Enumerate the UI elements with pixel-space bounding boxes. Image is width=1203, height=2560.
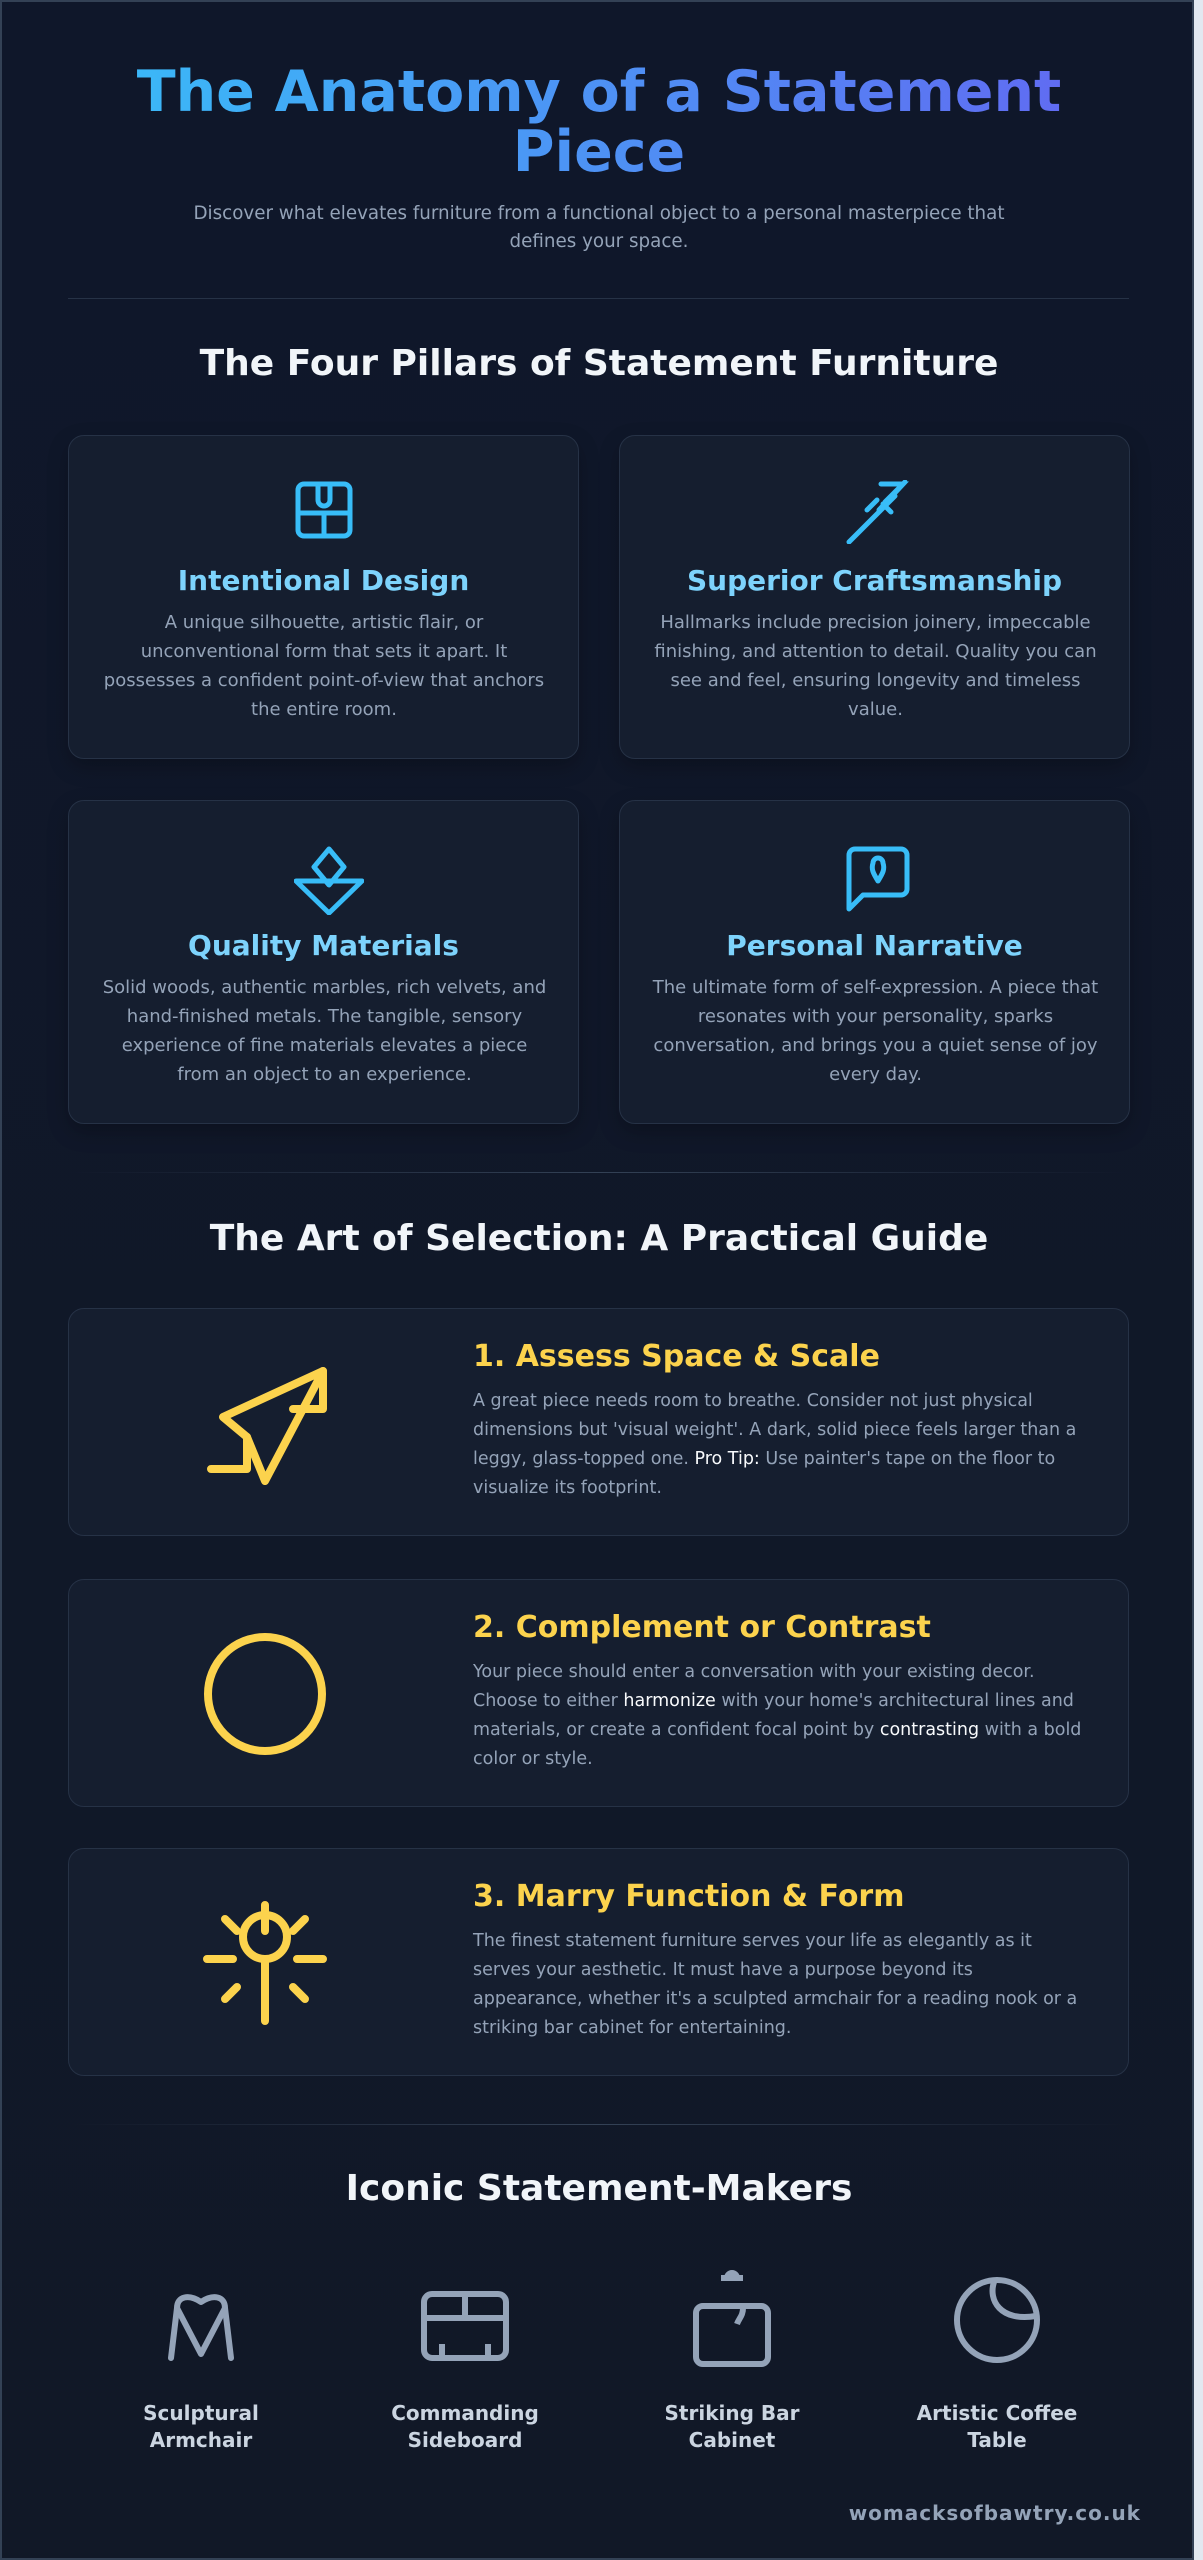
panel: materials: Quality Materials bbox=[188, 929, 459, 962]
icon: bar cabinet bbox=[693, 2270, 771, 2367]
item: coffee table: Table bbox=[967, 2428, 1027, 2452]
panel: step 1: A great piece needs room to breathe. Consider not just physical dimensions but 'visual weight'. A dark, solid piece feels larger than a leggy, glass-topped one. Pro Tip: Use painter's tape on the floor to visualize its footprint. bbox=[473, 1391, 1076, 1498]
item: bar cabinet bbox=[665, 2270, 800, 2452]
icon: speech bubble bbox=[846, 846, 910, 912]
icon: sideboard bbox=[421, 2291, 509, 2361]
footer: womacksofbawtry.co.uk bbox=[849, 2501, 1141, 2525]
item: coffee table bbox=[916, 2277, 1077, 2452]
icon: gem bbox=[294, 846, 364, 915]
item: coffee table: Artistic Coffee bbox=[917, 2401, 1077, 2425]
icon: grid bbox=[296, 482, 352, 538]
panel: craftsmanship: Superior Craftsmanship bbox=[687, 564, 1062, 597]
panel: craftsmanship: Hallmarks include precision joinery, impeccable finishing, and attention to detail. Quality you can see and feel, ensuring longevity and timeless value. bbox=[654, 612, 1097, 720]
subtitle: Discover what elevates furniture from a functional object to a personal masterpiece that defines your space. bbox=[193, 203, 1005, 252]
item: armchair: Sculptural bbox=[143, 2401, 259, 2425]
icon: armchair bbox=[168, 2294, 234, 2361]
item: armchair: Armchair bbox=[150, 2428, 252, 2452]
panel: step 2 bbox=[68, 1579, 1129, 1807]
panel: step 3: 3. Marry Function & Form bbox=[473, 1879, 904, 1914]
icon: tools bbox=[846, 480, 909, 544]
item: bar cabinet: Striking Bar bbox=[665, 2401, 799, 2425]
panel: step 1 bbox=[68, 1308, 1129, 1536]
panel: narrative bbox=[619, 800, 1130, 1124]
panel: step 2: 2. Complement or Contrast bbox=[473, 1610, 931, 1645]
item: sideboard: Sideboard bbox=[408, 2428, 522, 2452]
title: The Anatomy of a Statement bbox=[137, 59, 1061, 125]
panel: narrative: The ultimate form of self-expression. A piece that resonates with your personality, sparks conversation, and brings you a quiet sense of joy every day. bbox=[653, 977, 1098, 1085]
panel: intentional design: A unique silhouette, artistic flair, or unconventional form that sets it apart. It possesses a confident point-of-view that anchors the entire room. bbox=[104, 612, 544, 720]
panel: step 2: Your piece should enter a conversation with your existing decor. Choose to either harmonize with your home's architectural lines and materials, or create a confident focal point by contrasting with a bold color or style. bbox=[473, 1662, 1081, 1769]
panel: craftsmanship bbox=[619, 435, 1130, 759]
panel: materials: Solid woods, authentic marbles, rich velvets, and hand-finished metals. The tangible, sensory experience of fine materials elevates a piece from an object to an experience. bbox=[103, 977, 546, 1085]
panel: step 1: 1. Assess Space & Scale bbox=[473, 1339, 880, 1374]
item: sideboard bbox=[391, 2291, 539, 2452]
heading: iconic: Iconic Statement-Makers bbox=[346, 2168, 852, 2209]
icon: circle bbox=[204, 1633, 326, 1755]
heading: four pillars: The Four Pillars of Statement Furniture bbox=[200, 343, 998, 384]
icon: lamp bbox=[203, 1901, 327, 2025]
panel: step 3: The finest statement furniture serves your life as elegantly as it serves your aesthetic. It must have a purpose beyond its appearance, whether it's a sculpted armchair for a reading nook or a striking bar cabinet for entertaining. bbox=[473, 1931, 1077, 2038]
title bbox=[62, 62, 1136, 182]
panel: intentional design: Intentional Design bbox=[178, 564, 469, 597]
icon: paper plane bbox=[207, 1367, 327, 1485]
item: bar cabinet: Cabinet bbox=[689, 2428, 775, 2452]
item: armchair bbox=[143, 2294, 259, 2452]
panel: materials bbox=[68, 800, 579, 1124]
icon: coffee table bbox=[954, 2277, 1040, 2363]
panel: narrative: Personal Narrative bbox=[726, 929, 1023, 962]
item: sideboard: Commanding bbox=[391, 2401, 539, 2425]
heading: selection guide: The Art of Selection: A Practical Guide bbox=[210, 1218, 988, 1259]
title: Piece bbox=[513, 119, 685, 185]
panel: step 3 bbox=[68, 1848, 1129, 2076]
panel: intentional design bbox=[68, 435, 579, 759]
